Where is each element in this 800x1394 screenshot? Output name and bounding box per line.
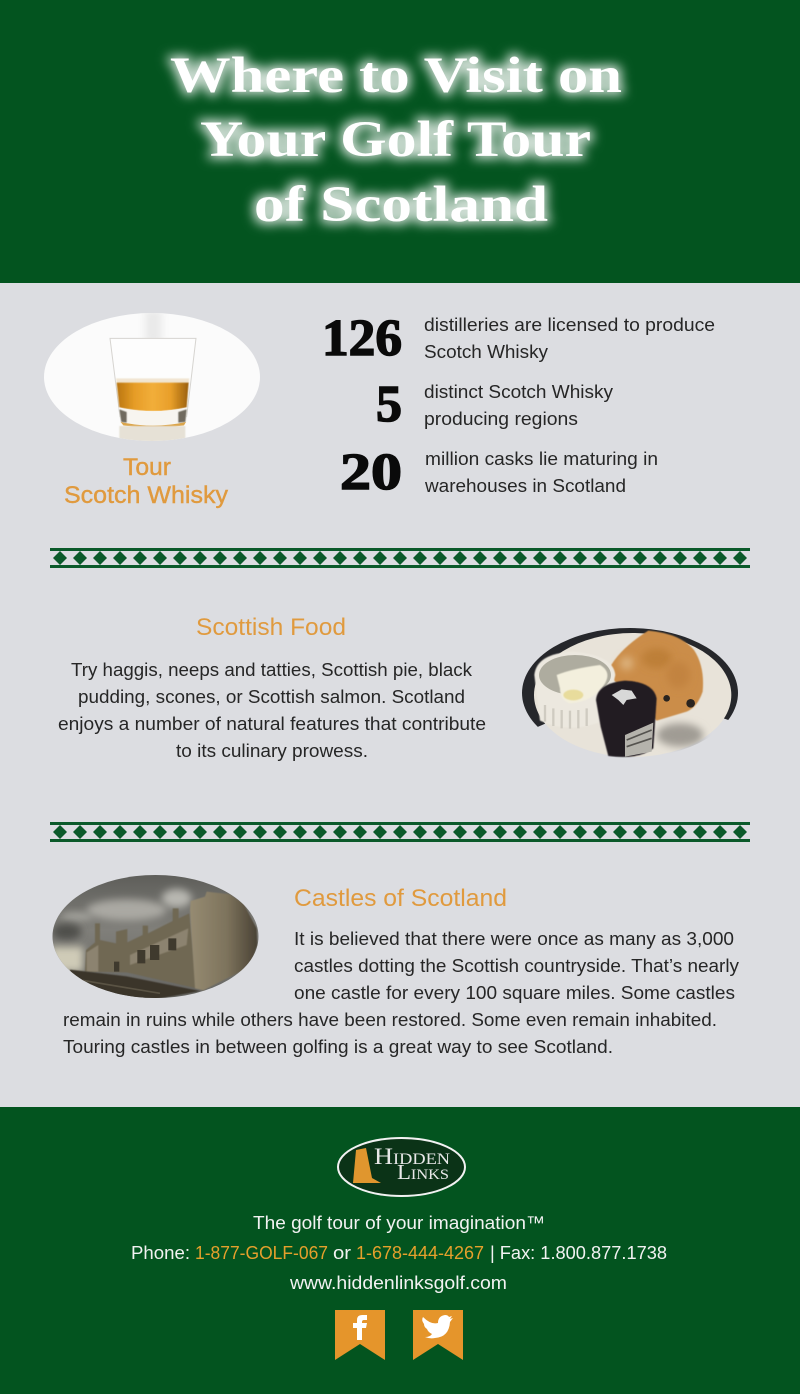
photo: scone plate: [522, 628, 738, 758]
food text: to its culinary prowess.: [176, 741, 368, 761]
icon: facebook: [335, 1310, 385, 1360]
icon: twitter: [413, 1310, 463, 1360]
stat: 126 distilleries: 126: [322, 310, 402, 367]
stat: 20 million casks: warehouses in Scotland: [424, 476, 626, 496]
castles text: remain in ruins while others have been restored. Some even remain inhabited.: [63, 1010, 717, 1030]
stat: 126 distilleries: Scotch Whisky: [424, 342, 548, 362]
title: of Scotland: [254, 177, 548, 233]
title: [170, 48, 622, 233]
contact line: or: [333, 1242, 351, 1263]
logo: hidden links: [338, 1138, 465, 1196]
stat: 5 regions: producing regions: [424, 409, 578, 429]
heading: tour scotch whisky: Scotch Whisky: [64, 482, 228, 509]
castles text: one castle for every 100 square miles. Some castles: [294, 983, 735, 1003]
title: Where to Visit on: [170, 48, 622, 104]
contact line: | Fax: 1.800.877.1738: [490, 1242, 667, 1263]
logo: hidden links: LINKS: [397, 1160, 449, 1184]
stat: 5 regions: 5: [376, 376, 402, 433]
contact line: 1-678-444-4267: [356, 1242, 484, 1263]
contact line: 1-877-GOLF-067: [195, 1242, 328, 1263]
tagline: The golf tour of your imagination™: [253, 1212, 545, 1233]
heading: scottish food: Scottish Food: [196, 614, 346, 641]
header panel: [0, 0, 800, 283]
castles text: It is believed that there were once as many as 3,000: [294, 929, 734, 949]
panel: scottish food: [58, 614, 743, 763]
stat: 126 distilleries: distilleries are licensed to produce: [424, 315, 715, 335]
food text: [58, 660, 486, 761]
contact line: [131, 1242, 667, 1263]
stat: 20 million casks: 20: [340, 444, 402, 501]
title: Your Golf Tour: [200, 112, 591, 168]
food text: Try haggis, neeps and tatties, Scottish pie, black: [71, 660, 473, 680]
castles text: castles dotting the Scottish countryside. That’s nearly: [294, 956, 739, 976]
castles text: Touring castles in between golfing is a great way to see Scotland.: [63, 1037, 613, 1057]
stat: 5 regions: distinct Scotch Whisky: [424, 382, 613, 402]
footer panel: [0, 1107, 800, 1394]
heading: castles of scotland: Castles of Scotland: [294, 885, 507, 912]
food text: enjoys a number of natural features that contribute: [58, 714, 486, 734]
panel: whisky: [40, 310, 715, 509]
stat: 5 regions: [376, 376, 613, 433]
photo: castle: [52, 875, 258, 998]
panel: castles of scotland: [47, 868, 739, 1057]
logo: hidden links: HIDDEN: [374, 1144, 451, 1169]
stat: 126 distilleries: [322, 310, 715, 367]
castles text: [63, 929, 739, 1057]
stat: 20 million casks: million casks lie maturing in: [425, 449, 658, 469]
heading: tour scotch whisky: Tour: [123, 454, 171, 481]
food text: pudding, scones, or Scottish salmon. Scotland: [78, 687, 465, 707]
contact line: Phone:: [131, 1242, 190, 1263]
stat: 20 million casks: [340, 444, 658, 501]
website: www.hiddenlinksgolf.com: [289, 1272, 507, 1293]
photo: whisky glass: [40, 310, 263, 443]
heading: tour scotch whisky: [64, 454, 228, 509]
